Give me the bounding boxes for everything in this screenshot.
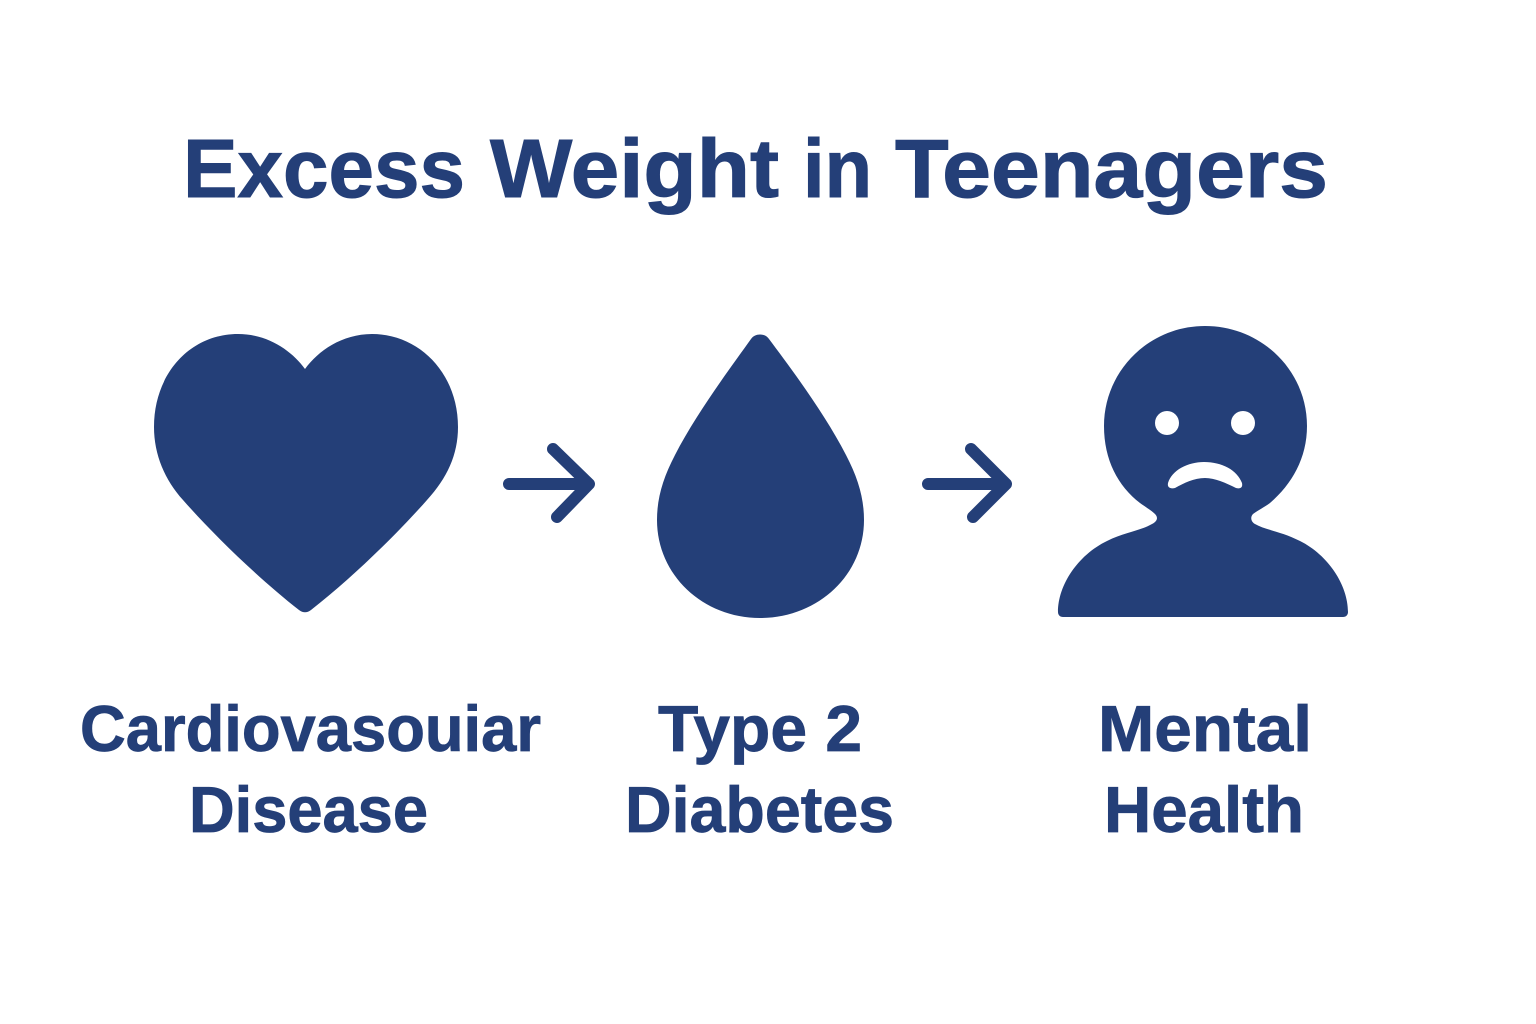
icon: sad person: [1058, 326, 1348, 617]
right eye: [1231, 411, 1255, 435]
title: Weight: [490, 122, 779, 215]
label: mental health: Health: [1104, 773, 1304, 846]
icon: heart: [154, 334, 458, 612]
label: type 2 diabetes: [625, 692, 894, 846]
title: Teenagers: [895, 122, 1328, 215]
label: mental health: [1098, 692, 1312, 846]
arrow: drop to person: [928, 449, 1006, 517]
label: cardiovascular disease: Disease: [189, 773, 428, 846]
left eye: [1155, 411, 1179, 435]
label: mental health: Mental: [1098, 692, 1312, 765]
title: in: [803, 122, 872, 215]
label: cardiovascular disease: [80, 692, 541, 846]
sad mouth: [1168, 462, 1242, 488]
label: type 2 diabetes: Type 2: [658, 692, 862, 765]
title: Excess: [183, 122, 465, 215]
title: [183, 122, 1328, 215]
icon: drop: [657, 334, 864, 618]
arrow: heart to drop: [509, 449, 589, 517]
label: type 2 diabetes: Diabetes: [625, 773, 894, 846]
label: cardiovascular disease: Cardiovasouiar: [80, 692, 541, 765]
